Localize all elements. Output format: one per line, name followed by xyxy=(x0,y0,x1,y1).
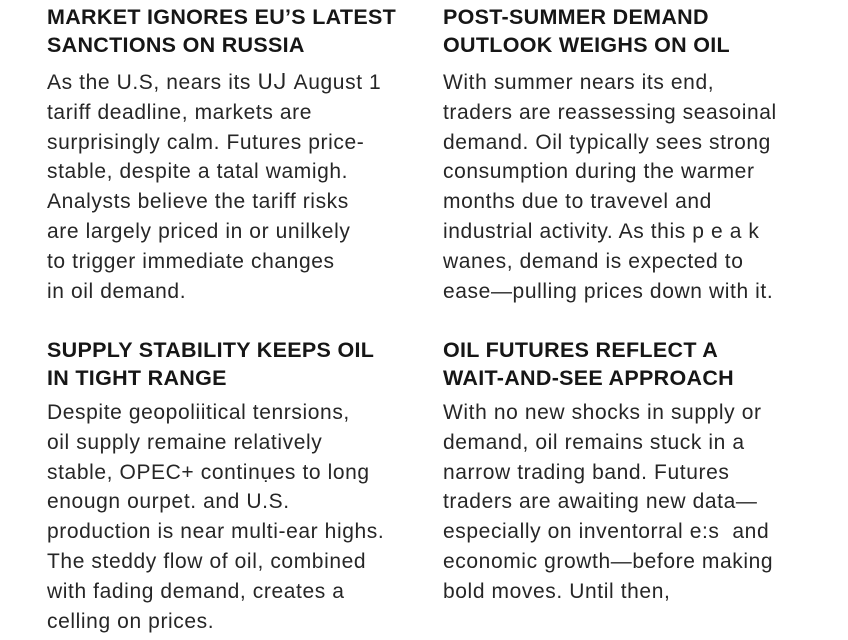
text block: supply stability body: Despite geopoliitical tenrsions, xyxy=(47,401,350,424)
text block: EU sanctions body: As the U.S, nears its ᑌᒍ August 1 xyxy=(47,71,381,94)
text block: EU sanctions body: Analysts believe the tariff risks xyxy=(47,190,349,213)
panel: supply stability xyxy=(47,338,384,633)
heading: supply stability: IN TIGHT RANGE xyxy=(47,366,227,390)
text block: EU sanctions body: are largely priced in or unilkely xyxy=(47,220,350,243)
text block: post-summer body: industrial activity. As this p e a k xyxy=(443,220,760,243)
text block: post-summer body xyxy=(443,71,777,303)
text block: EU sanctions body: tariff deadline, markets are xyxy=(47,101,312,124)
text block: wait-and-see body: demand, oil remains stuck in a xyxy=(443,431,745,454)
text block: supply stability body: enougn ourpet. and U.S. xyxy=(47,490,290,513)
text block: EU sanctions body: to trigger immediate changes xyxy=(47,250,335,273)
text block: post-summer body: consumption during the warmer xyxy=(443,160,755,183)
heading: post-summer demand: POST-SUMMER DEMAND xyxy=(443,5,709,29)
text block: wait-and-see body xyxy=(443,401,773,603)
text block: supply stability body: stable, OPEC+ continụes to long xyxy=(47,461,370,484)
heading: market ignores EU sanctions: MARKET IGNORES EU’S LATEST xyxy=(47,5,396,29)
heading: supply stability: SUPPLY STABILITY KEEPS OIL xyxy=(47,338,374,362)
text block: post-summer body: ease—pulling prices down with it. xyxy=(443,280,773,303)
text block: supply stability body: oil supply remaine relatively xyxy=(47,431,322,454)
heading: oil futures wait-and-see: OIL FUTURES REFLECT A xyxy=(443,338,718,362)
text block: EU sanctions body: in oil demand. xyxy=(47,280,186,303)
text block: wait-and-see body: With no new shocks in supply or xyxy=(443,401,762,424)
panel: wait-and-see xyxy=(443,338,773,603)
text block: EU sanctions body: stable, despite a tatal wamigh. xyxy=(47,160,348,183)
heading: oil futures wait-and-see xyxy=(443,338,734,390)
panel: EU sanctions xyxy=(47,5,396,303)
text block: post-summer body: traders are reassessing seasoinal xyxy=(443,101,777,124)
text block: EU sanctions body xyxy=(47,71,381,303)
heading: post-summer demand: OUTLOOK WEIGHS ON OIL xyxy=(443,33,730,57)
heading: supply stability xyxy=(47,338,374,390)
text block: wait-and-see body: especially on inventorral e:s and xyxy=(443,520,769,543)
text block: wait-and-see body: bold moves. Until then, xyxy=(443,580,670,603)
heading: market ignores EU sanctions xyxy=(47,5,396,57)
text block: wait-and-see body: economic growth—before making xyxy=(443,550,773,573)
text block: EU sanctions body: surprisingly calm. Futures price- xyxy=(47,131,364,154)
text block: post-summer body: demand. Oil typically sees strong xyxy=(443,131,771,154)
text block: supply stability body: production is near multi-ear highs. xyxy=(47,520,384,543)
text block: post-summer body: With summer nears its end, xyxy=(443,71,714,94)
text block: supply stability body: celling on prices. xyxy=(47,610,214,633)
text block: post-summer body: wanes, demand is expected to xyxy=(443,250,743,273)
text block: post-summer body: months due to travevel and xyxy=(443,190,712,213)
heading: post-summer demand xyxy=(443,5,730,57)
heading: market ignores EU sanctions: SANCTIONS ON RUSSIA xyxy=(47,33,305,57)
panel: post-summer demand xyxy=(443,5,777,303)
heading: oil futures wait-and-see: WAIT-AND-SEE APPROACH xyxy=(443,366,734,390)
text block: supply stability body: The steddy flow of oil, combined xyxy=(47,550,366,573)
text block: wait-and-see body: traders are awaiting new data— xyxy=(443,490,758,513)
text block: supply stability body xyxy=(47,401,384,633)
text block: supply stability body: with fading demand, creates a xyxy=(47,580,345,603)
text block: wait-and-see body: narrow trading band. Futures xyxy=(443,461,729,484)
